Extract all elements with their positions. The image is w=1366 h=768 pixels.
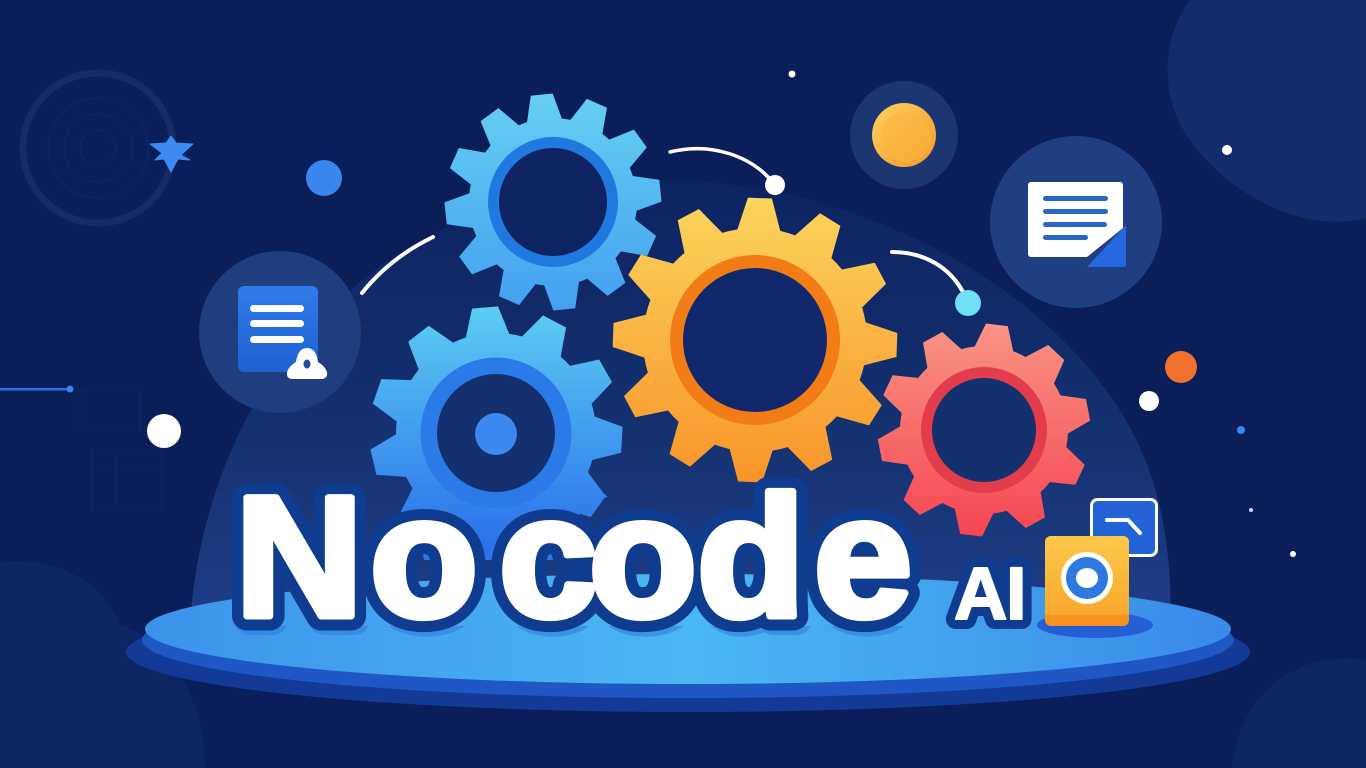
gear body xyxy=(875,320,1095,540)
document sheet xyxy=(238,286,318,372)
dot: white left xyxy=(147,414,181,448)
line with dot: left edge xyxy=(0,386,74,392)
gear lower body behind title xyxy=(412,498,582,560)
platform shadow rim xyxy=(126,592,1250,712)
tile glyph xyxy=(1107,520,1140,533)
yellow tile xyxy=(1045,536,1129,626)
document lines xyxy=(1043,196,1108,240)
gear: top blue xyxy=(440,88,666,314)
faint blueprint lines: lower left xyxy=(80,390,162,510)
arc connector: top with dot xyxy=(670,149,785,195)
gear hole xyxy=(437,374,555,492)
gear: red xyxy=(875,320,1095,540)
icon: app tiles xyxy=(1037,500,1156,638)
gear fin xyxy=(574,480,608,501)
AI fill: AI xyxy=(954,552,1027,635)
tile target xyxy=(1061,552,1113,604)
platform side xyxy=(142,582,1234,698)
gear hole xyxy=(683,268,827,412)
gear body xyxy=(610,195,900,485)
title outline: Nocode xyxy=(235,460,912,652)
dot: blue xyxy=(306,160,342,196)
gear ring xyxy=(488,137,618,267)
blue tile xyxy=(1092,500,1156,556)
gear centre dot xyxy=(475,413,517,455)
gear body xyxy=(440,88,666,314)
icon circle xyxy=(990,136,1162,308)
small stars xyxy=(788,70,1296,557)
title fill: Nocode xyxy=(235,460,912,652)
gear hole xyxy=(932,378,1036,482)
dot: orange xyxy=(1165,351,1197,383)
background blob: bottom right xyxy=(1232,658,1366,768)
platform top xyxy=(145,574,1231,684)
document sheet xyxy=(1028,182,1123,257)
gear: left blue xyxy=(365,302,627,564)
gear: yellow xyxy=(610,195,900,485)
gear hole xyxy=(499,148,607,256)
icon: blue star xyxy=(150,136,193,172)
tile shadow xyxy=(1037,612,1153,638)
folded corner xyxy=(1087,225,1126,267)
background blob: bottom left xyxy=(0,561,205,768)
decorative ring: top left xyxy=(23,73,173,223)
gear body xyxy=(370,306,622,518)
icon: coin xyxy=(850,81,958,189)
title: Nocode xyxy=(232,477,921,636)
gear ring xyxy=(420,358,572,508)
icon circle xyxy=(199,251,361,413)
gear ring xyxy=(670,255,840,425)
panel: document icon right xyxy=(990,136,1162,308)
arc connector: left xyxy=(362,237,433,293)
lock badge xyxy=(287,348,327,379)
label: AI xyxy=(954,552,1027,635)
platform xyxy=(126,574,1250,712)
dome backdrop xyxy=(190,180,1171,640)
arc connector: right with dot xyxy=(892,252,981,316)
yellow tile face xyxy=(1045,536,1129,615)
document lines xyxy=(250,305,304,343)
panel: document icon left xyxy=(199,251,361,413)
title shadow: Nocode xyxy=(238,464,915,656)
AI outline: AI xyxy=(954,552,1027,635)
background blob: top right xyxy=(1168,0,1366,222)
gear ring xyxy=(921,367,1047,493)
dot: white right xyxy=(1139,391,1159,411)
